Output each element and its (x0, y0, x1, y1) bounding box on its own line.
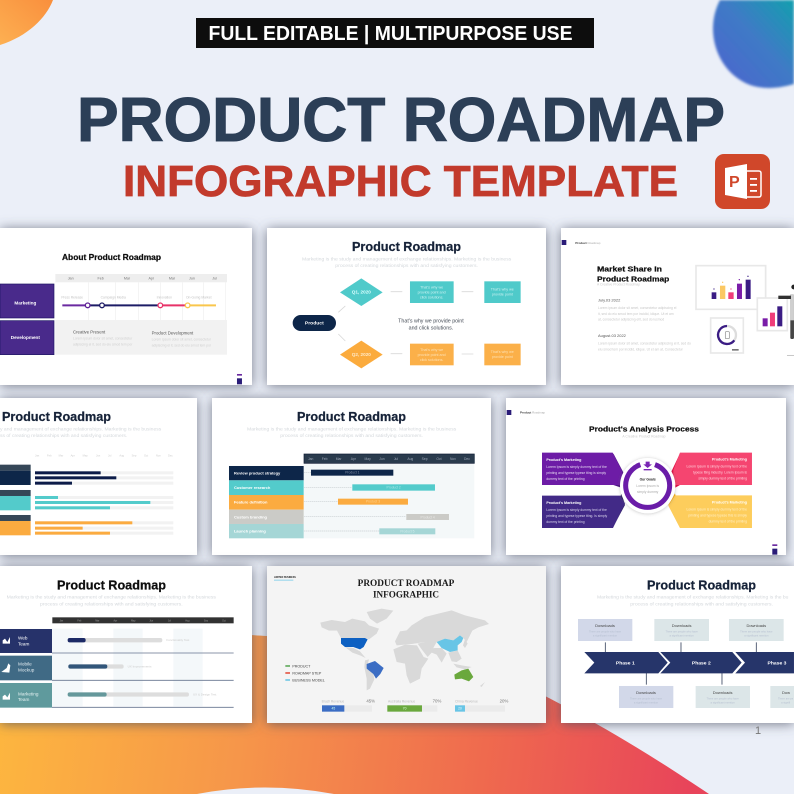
task rows (229, 466, 304, 538)
description: Marketing is the study and management of exchange relationships. Marketing is the bu (597, 595, 789, 601)
panel: bar roadmap: Nov (156, 453, 161, 457)
icon: PowerPoint: P (729, 174, 740, 191)
gantt bars: Product 5 (400, 530, 415, 534)
row: mobile mockup (0, 656, 152, 680)
heading: Product Roadmap (297, 409, 406, 424)
month header: Jan (59, 620, 64, 622)
panel: phases roadmap (561, 566, 794, 723)
panel: about product roadmap: Jun (189, 276, 195, 280)
badge: full editable: FULL EDITABLE | MULTIPURPOSE USE (208, 23, 572, 45)
donut card (711, 318, 743, 353)
row: mobile mockup: UX Improvements (128, 665, 152, 669)
month header: Aug (407, 457, 413, 461)
panel: bar roadmap: Dec (168, 453, 173, 457)
panel: bar roadmap: Oct (144, 453, 148, 457)
legend: BUSINESS MODEL (292, 678, 325, 682)
panel: flow roadmap (267, 228, 546, 385)
panel: about product roadmap: Jul (212, 276, 217, 280)
text block: dates: eiu smod tem por incidid, idique. Ut et am at, Consectetur (598, 348, 684, 352)
top boxes: a significant mention (744, 634, 769, 638)
panel: about product roadmap: Press Release (61, 295, 83, 299)
description (302, 257, 512, 269)
callout: top left: dummy text of the printing (546, 477, 585, 481)
top boxes: Downloads (746, 623, 766, 628)
panel: bar roadmap: May (83, 453, 88, 457)
small bar chart card (757, 298, 787, 331)
orange boxes: click solutions. (420, 358, 443, 362)
block: development: Development (11, 335, 40, 340)
heading: about product roadmap: About Product Roadmap (62, 252, 161, 262)
month header: Jan (308, 457, 313, 461)
callout: top right: Product's Marketing (712, 457, 747, 461)
Australia (454, 669, 473, 681)
description: y and management of exchange relationships. Marketing is the business (0, 427, 162, 433)
bottom boxes: Downloads (713, 690, 733, 695)
row: mobile mockup: Mockup (18, 668, 35, 673)
description (247, 427, 457, 439)
panel: bar roadmap: Aug (119, 453, 125, 457)
block: marketing (0, 284, 54, 318)
description (0, 427, 162, 439)
panel: about product roadmap: adipiscing el it, sed do eiu smod tem por (73, 342, 133, 346)
callout: top right (671, 453, 752, 490)
month header: Jul (394, 457, 398, 461)
world map (320, 609, 489, 690)
row: marketing team: Marketing (18, 691, 39, 696)
month header: Mar (336, 457, 342, 461)
description: process of creating relationships with and satisfying customers. (40, 601, 183, 607)
panel: about product roadmap: Apr (148, 276, 155, 280)
revenue bars: 20 (458, 707, 462, 711)
diamond: Q2 (340, 341, 383, 368)
timeline (62, 303, 216, 308)
panel: about product roadmap: Lorem ipsum dolor sit amet, consectetur (73, 336, 133, 340)
subtitle: INFOGRAPHIC TEMPLATE (123, 157, 678, 206)
month header: Sep (422, 457, 428, 461)
Brazil (367, 661, 384, 679)
text block: dates (598, 297, 691, 352)
top boxes: a significant mention (670, 634, 694, 638)
text block: dates: at, consectetur adipiscing elit, sed do iusmod (598, 318, 664, 322)
panel: about product roadmap: Campaign Media (101, 295, 126, 299)
brand (274, 577, 296, 581)
center text: and click solutions. (409, 326, 453, 332)
task rows: Feature definition (234, 500, 268, 505)
teal boxes: click solutions. (420, 296, 443, 300)
description: process of creating relationships with and satisfying customers. (630, 601, 773, 607)
month header: Apr (114, 619, 117, 622)
circle: our goals: simply dummy (637, 490, 659, 494)
month header: Oct (436, 457, 442, 461)
callout: bottom right: dummy text of the printing (709, 520, 747, 524)
row: marketing team (0, 683, 216, 708)
row: web team: Team (18, 642, 30, 647)
circle: our goals: Our Goals (640, 478, 656, 482)
diamond: Q2: Q2, 2020 (352, 352, 371, 357)
month header (304, 454, 474, 463)
orange boxes: That's why we (491, 350, 514, 354)
top boxes: There are people who have (665, 630, 698, 634)
panel: about product roadmap: adipiscing el it, sed do eiu smod tem por (152, 343, 212, 347)
panel: team roadmap (0, 566, 252, 723)
panel: bar roadmap: Apr (71, 453, 75, 457)
USA (341, 638, 368, 649)
gantt bars: Product 2 (387, 486, 401, 490)
panel: bar roadmap: Sep (132, 453, 137, 457)
top boxes: Downloads (595, 623, 615, 628)
gantt bars: Product 3 (366, 500, 380, 504)
heading: PRODUCT ROADMAP (358, 578, 455, 588)
text block: dates: August.03 2022 (598, 333, 627, 338)
month header: Apr (351, 457, 357, 461)
panel: gantt roadmap (212, 398, 491, 555)
callout: bottom right: Product's Marketing (712, 500, 747, 504)
description: Marketing is the study and management of exchange relationships. Marketing is the business (302, 257, 512, 263)
callout: bottom left: printing and typese typese tting. Is simply (546, 514, 608, 518)
center text: That's why we provide point (398, 319, 464, 325)
panel: market share: A Creative Product Roadmap (597, 283, 640, 287)
panel: world map (267, 566, 546, 723)
heading: market share: Market Share In (597, 265, 663, 274)
legend: ROADMAP STEP (292, 671, 322, 675)
chevrons (584, 652, 794, 673)
month header: Sep (204, 620, 209, 622)
text block: dates: Lorem ipsum dolor sit amet, consectetur adipiscing el (598, 306, 677, 310)
top boxes: Downloads (672, 623, 692, 628)
teal boxes: provide point (492, 293, 513, 297)
bottom boxes: There are people who have (630, 697, 663, 701)
circle: our goals: Lorem Ipsum is (636, 484, 659, 488)
decorative blue blob top right (713, 0, 794, 88)
teal boxes: That's why we (420, 286, 443, 290)
callout: bottom right: Lorem Ipsum is simply dummy text of the (686, 508, 747, 512)
text block: dates: it, sed do eiu smod tem por incidid, idique. Ut et am (598, 312, 674, 316)
heading: Product Roadmap (352, 239, 461, 254)
bottom boxes: There are pe (778, 697, 794, 701)
description: ss of creating relationships with and satisfying customers. (0, 433, 127, 439)
panel: bar roadmap: Jan (35, 453, 40, 457)
callout: top left: printing and typese typese tting is simply (546, 471, 606, 475)
top boxes: There are people who have (740, 630, 773, 634)
orange boxes: provide point (492, 355, 513, 359)
month header: Aug (185, 619, 190, 622)
callout: top left: Lorem Ipsum is simply dummy text of the (546, 465, 607, 469)
top boxes: There are people who have (589, 630, 622, 634)
description (7, 595, 216, 607)
callout: bottom left: Product's Marketing (546, 501, 581, 505)
text block: dates: Lorem ipsum dolor sit amet, consectetur adipiscing el it, sed do (598, 342, 691, 346)
panel: bar roadmap: Mar (59, 453, 63, 457)
task rows: Review product strategy (234, 471, 281, 476)
bottom boxes: Dow (782, 690, 790, 695)
revenue bars: 70% (433, 698, 441, 703)
chevrons: Phase 2 (692, 661, 711, 667)
block: development (0, 321, 54, 355)
bars (35, 471, 173, 535)
month header: Nov (450, 457, 456, 461)
heading: market share: Product Roadmap (597, 274, 670, 283)
panel: analysis process (506, 398, 786, 555)
month header (52, 617, 234, 623)
center text (398, 319, 464, 332)
task rows: Launch planning (234, 529, 266, 534)
panel: analysis process: A Creative Product Roadmap (622, 434, 666, 438)
decorative orange blob top left (0, 0, 53, 45)
node: product (293, 315, 336, 331)
icon: PowerPoint (715, 154, 770, 209)
panel: market share: Product Roadmap (575, 241, 601, 245)
panel: about product roadmap: Feb (98, 276, 104, 280)
callout: top right: simply dummy text of the printing (698, 477, 747, 481)
callout: bottom right: printing and typese typese this is simply (688, 514, 747, 518)
badge: full editable (196, 18, 594, 48)
panel: bar roadmap: Feb (47, 453, 52, 457)
bottom boxes: a significant mention (634, 701, 659, 705)
bottom boxes: a significant mention (711, 701, 735, 705)
heading: Product Roadmap (647, 577, 756, 592)
panel: bar roadmap (0, 398, 197, 555)
panel: analysis process: Product Roadmap (520, 411, 545, 415)
bottom boxes: There are people who have (706, 697, 739, 701)
heading: INFOGRAPHIC (373, 589, 439, 599)
month header: Dec (464, 457, 470, 461)
description (597, 595, 789, 607)
panel: about product roadmap: Mar (169, 276, 176, 280)
orange boxes: That's why we (420, 348, 443, 352)
panel: bar roadmap: Jun (96, 453, 101, 457)
title: PRODUCT ROADMAP (77, 86, 725, 155)
teal boxes: That's why we (491, 288, 514, 292)
callout: top right: Lorem Ipsum is simply dummy text of the (686, 465, 747, 469)
block: marketing: Marketing (14, 300, 36, 305)
panel: about product roadmap: Mar (124, 276, 131, 280)
orange boxes: provide point and (418, 353, 446, 357)
teal boxes: provide point and (418, 291, 446, 295)
heading (358, 578, 455, 599)
month header: Jun (379, 457, 385, 461)
chevrons: Phase 3 (768, 661, 787, 667)
description: process of creating relationships with and satisfying customers. (335, 263, 478, 269)
top boxes: a significant mention (593, 634, 618, 638)
month header: Oct (222, 619, 226, 622)
revenue bars: 70 (403, 707, 407, 711)
callout: bottom left: Lorem Ipsum is simply dummy text of the (546, 508, 607, 512)
month header: Feb (77, 620, 82, 622)
heading: Product Roadmap (57, 577, 166, 592)
panel: about product roadmap: Product Development (152, 330, 194, 335)
description: Marketing is the study and management of exchange relationships. Marketing is the business (7, 595, 216, 601)
orange boxes (410, 344, 521, 365)
panel: about product roadmap: Innovation (157, 295, 172, 299)
panel: bar roadmap: Jul (108, 453, 112, 457)
gantt bars: Product 4 (421, 515, 435, 519)
gantt bars: Product 1 (345, 471, 360, 475)
revenue bars: 45 (331, 707, 335, 711)
revenue bars: 45% (366, 698, 375, 703)
month header: Feb (322, 457, 328, 461)
heading: market share (597, 265, 670, 283)
description: process of creating relationships with and satisfying customers. (280, 433, 423, 439)
row: marketing team: Team (18, 697, 30, 702)
top boxes (578, 619, 784, 641)
month header: Mar (95, 619, 100, 622)
month header: Jun (149, 620, 154, 622)
brand: LIMITED BUSINESS (274, 577, 296, 579)
person figure (778, 285, 794, 356)
bottom boxes: Downloads (636, 690, 656, 695)
page number: 1 (755, 725, 761, 737)
revenue bars: Brazil Revenue (322, 699, 344, 703)
callout: top left: Product's Marketing (546, 458, 581, 462)
month header: May (365, 457, 371, 461)
diamond: Q1 (340, 278, 383, 306)
row: web team: Web (18, 636, 28, 641)
revenue bars: Australia Revenue (388, 699, 415, 703)
bottom boxes: a signifi (781, 701, 791, 705)
teal boxes (410, 281, 521, 303)
callout: bottom left: dummy text of the printing (546, 520, 585, 524)
callout: top left (542, 453, 623, 488)
description: Marketing is the study and management of exchange relationships. Marketing is the business (247, 427, 457, 433)
month header: May (131, 620, 136, 622)
task rows: Custom branding (234, 514, 268, 519)
category blocks (0, 465, 31, 535)
revenue bars: China Revenue (455, 699, 478, 703)
chevrons: Phase 1 (616, 661, 635, 667)
decorative light hump bottom (197, 788, 334, 794)
revenue bars (322, 698, 508, 712)
bar chart card (696, 266, 766, 309)
diamond: Q1: Q1, 2020 (352, 290, 371, 295)
row: mobile mockup: Mobile (18, 662, 32, 667)
panel: about product roadmap: Lorem ipsum dolor sit amet, consectetur (152, 337, 212, 341)
panel: market share (561, 228, 794, 385)
heading: Product's Analysis Process (589, 424, 699, 433)
China (437, 635, 463, 652)
decorative gradient wave bottom (0, 633, 709, 794)
panel: about product roadmap (0, 228, 252, 385)
callout: bottom left (542, 493, 625, 528)
heading: Product Roadmap (2, 409, 111, 424)
bottom boxes (619, 686, 794, 708)
month header: Jul (168, 620, 171, 622)
legend: PRODUCT (292, 664, 311, 668)
panel: about product roadmap: Creative Present (73, 330, 106, 335)
arrows (605, 642, 756, 685)
task rows: Customer research (234, 485, 271, 490)
gantt bars (311, 470, 449, 534)
callout: bottom right (668, 493, 752, 528)
revenue bars: 20% (500, 698, 508, 703)
callout: top right: typese tting industry. Lorem Ipsum is (693, 471, 747, 475)
panel: about product roadmap: On-Going Market (186, 295, 212, 299)
row: web team: Functionality Test (166, 638, 189, 642)
node: product: Product (305, 321, 324, 327)
panel: about product roadmap: Jan (68, 276, 74, 280)
text block: dates: July.03 2022 (598, 297, 621, 302)
row: marketing team: UX & Design Test (193, 692, 216, 696)
legend (285, 664, 325, 682)
row: web team (0, 629, 189, 653)
circle: our goals (620, 458, 675, 513)
